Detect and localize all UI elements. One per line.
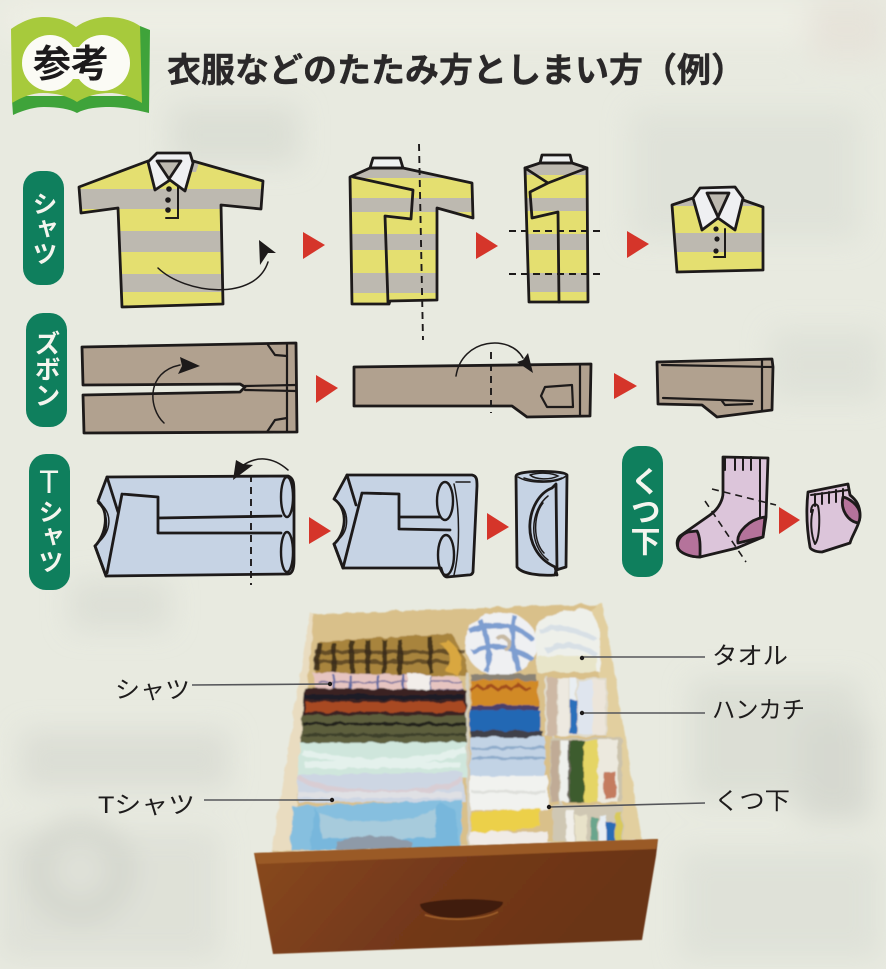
arrow: trousers step 2 to 3	[614, 373, 637, 399]
arrow: shirt step 1 to 2	[303, 232, 325, 259]
arrow: sock to folded sock	[779, 507, 800, 534]
arrow: fold right side over	[158, 240, 276, 290]
photo: chest drawer with folded clothes	[192, 604, 705, 954]
arrow: fold in from the right	[233, 459, 288, 480]
badge label: 参考	[33, 44, 109, 86]
lavender T-shirt	[297, 772, 466, 802]
shirt step 1: polo laid flat	[70, 153, 276, 307]
column divider	[467, 672, 566, 848]
label pill: ズボン	[26, 313, 67, 427]
label pill: くつ下	[622, 446, 663, 577]
shirt step 4: finished fold	[670, 187, 770, 272]
olive shirt	[301, 715, 467, 744]
rolled towel: blue stripes	[465, 612, 537, 676]
pink plaid shirt	[312, 672, 464, 697]
drawer interior	[272, 604, 642, 852]
arrow: fold leg over	[153, 357, 200, 423]
arrow: fold in half	[456, 343, 533, 376]
blue T-shirt	[291, 800, 462, 850]
arrow: shirt step 3 to 4	[627, 231, 649, 258]
label pill: シャツ	[23, 171, 64, 285]
label pill: Tシャツ	[29, 454, 70, 590]
photo label: シャツ: シャツ	[115, 677, 190, 704]
trousers step 1: laid flat	[82, 343, 297, 433]
arrow: trousers step 1 to 2	[316, 375, 338, 403]
dark and red shirt	[302, 688, 467, 716]
trousers step 2: folded lengthwise	[354, 343, 591, 417]
T-shirt step 3: rolled	[516, 471, 567, 575]
socks stack	[470, 674, 548, 845]
label pill: シャツ: シャツ	[29, 191, 57, 266]
sock: folded	[807, 484, 860, 552]
photo label: タオル: タオル	[712, 643, 788, 670]
photo label: ハンカチ: ハンカチ	[712, 697, 805, 724]
shirt step 2: one side folded	[345, 144, 480, 340]
photo label: くつ下: くつ下	[714, 788, 790, 815]
T-shirt step 1: sleeves folded	[95, 459, 294, 585]
title: 衣服などのたたみ方としまい方（例）	[167, 52, 745, 90]
sock: unfolded with fold lines	[677, 457, 776, 562]
T-shirt step 2: folded once	[334, 475, 477, 577]
drawer front	[254, 839, 658, 954]
shirt step 3: both sides folded	[509, 155, 603, 302]
handkerchiefs	[545, 678, 623, 841]
label pill: Tシャツ: T	[39, 464, 59, 500]
arrow: T-shirt step 2 to 3	[487, 513, 509, 540]
label pill: くつ下: くつ下	[626, 466, 660, 556]
icon: open book badge	[11, 17, 150, 115]
label pill: ズボン: ズボン	[31, 330, 61, 408]
rolled towel: white	[535, 609, 600, 672]
plaid shirt	[314, 634, 467, 676]
arrow: shirt step 2 to 3	[476, 232, 498, 259]
mint T-shirt	[297, 742, 468, 778]
label pill: Tシャツ: シャツ	[35, 499, 63, 574]
photo pointer lines	[192, 656, 705, 809]
photo label: Tシャツ: Tシャツ	[98, 792, 195, 819]
trousers step 3: finished fold	[657, 359, 773, 417]
arrow: T-shirt step 1 to 2	[309, 517, 331, 544]
